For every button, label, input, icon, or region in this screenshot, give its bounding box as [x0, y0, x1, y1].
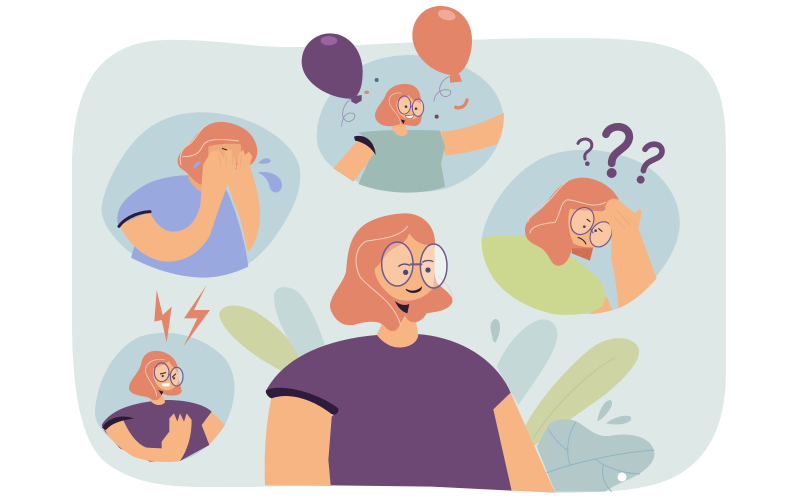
- vignette: angry with lightning: [95, 285, 234, 462]
- eyes and mouth: [583, 225, 586, 228]
- neck shadow: [158, 390, 163, 395]
- dot: large: [607, 168, 617, 178]
- mouth: [406, 288, 421, 292]
- highlight: [321, 36, 337, 45]
- dot: medium: [637, 176, 645, 184]
- eyes: [403, 270, 408, 275]
- arm and hand: [605, 199, 657, 308]
- shirt: [358, 130, 445, 193]
- arm and hand: [105, 413, 192, 462]
- blob: [102, 112, 300, 278]
- lens left: [382, 242, 413, 286]
- hair highlight: [356, 226, 408, 325]
- eyebrow: [222, 148, 227, 150]
- leaf: left blue: [274, 287, 325, 358]
- lightning left: [154, 290, 172, 342]
- small drops: [491, 319, 631, 424]
- finger lines: [613, 210, 630, 228]
- shirt: [267, 334, 512, 491]
- right arm: [202, 412, 225, 445]
- hair strand: [437, 275, 453, 302]
- teeth: [162, 383, 170, 386]
- eyes and brows: [160, 373, 176, 377]
- balloon strings: [342, 76, 452, 127]
- glasses: [154, 363, 183, 386]
- balloon: purple: [302, 33, 363, 104]
- leaf veins: [547, 422, 654, 492]
- blob: [95, 333, 234, 462]
- balloon: orange: [412, 6, 472, 83]
- hair: [330, 213, 453, 331]
- highlight: [437, 8, 457, 22]
- knot: [450, 74, 462, 83]
- shirt: [117, 175, 248, 278]
- confetti dots: [375, 78, 379, 82]
- near arm: [333, 138, 374, 182]
- hair highlight: [180, 124, 239, 165]
- eyes: [405, 105, 407, 108]
- plants behind main figure: [219, 287, 654, 492]
- neck: [392, 121, 408, 136]
- lightning right: [183, 285, 210, 347]
- near arm: [120, 150, 237, 262]
- left arm: [265, 390, 332, 486]
- vignette: happy with balloons: [302, 6, 504, 193]
- glasses: [382, 242, 447, 288]
- neck: [377, 300, 418, 347]
- eyebrows: [398, 260, 433, 267]
- hair highlight: [528, 181, 606, 233]
- bridge: [410, 261, 422, 267]
- right arm: [493, 393, 555, 493]
- leaf: right blue: [497, 319, 557, 405]
- face: [396, 95, 423, 119]
- neck: [188, 173, 202, 192]
- hair highlight: [389, 93, 402, 124]
- cuff: [119, 212, 150, 226]
- plants right: [491, 319, 654, 492]
- vignette: confused: [482, 127, 680, 315]
- confetti streamer: [456, 100, 467, 108]
- mouth: [405, 114, 414, 119]
- question: small: [578, 139, 592, 159]
- neck shadow: [395, 301, 409, 313]
- cuff: [354, 136, 376, 155]
- face: [375, 233, 435, 301]
- hair: [178, 122, 257, 184]
- question: medium: [643, 144, 662, 171]
- cuff: [102, 417, 134, 430]
- tear on hair: [193, 161, 202, 169]
- small drop near main figure: [490, 319, 500, 343]
- neck shadow: [401, 119, 405, 124]
- cuff: [266, 388, 338, 415]
- hair back shadow: [572, 245, 593, 261]
- hair highlight: [145, 359, 165, 397]
- leaf: large foreground: [537, 419, 654, 492]
- balloon body: [412, 6, 472, 75]
- leaf: right olive: [525, 338, 639, 447]
- leaf vein: [533, 358, 615, 438]
- tears: [258, 158, 282, 192]
- hair: [375, 84, 422, 126]
- background blob: [72, 38, 726, 493]
- shirt: [482, 235, 605, 315]
- knot: [351, 95, 362, 104]
- far arm: [442, 113, 504, 156]
- vignette: crying: [102, 112, 300, 278]
- confetti: [364, 78, 467, 119]
- blob: [317, 55, 503, 192]
- neck: [150, 393, 165, 405]
- white dot: [618, 472, 626, 482]
- face: [153, 361, 179, 390]
- main figure: [265, 213, 555, 493]
- face: [208, 144, 242, 168]
- lens right: [420, 244, 447, 288]
- shirt: [102, 400, 212, 462]
- finger lines: [219, 153, 242, 167]
- balloon body: [302, 33, 363, 99]
- question: large: [606, 127, 629, 163]
- hand fingers: [230, 150, 252, 180]
- hair: [525, 178, 620, 266]
- lower arm: [590, 297, 612, 314]
- leaf: left olive: [219, 305, 310, 372]
- dot: small: [585, 161, 590, 166]
- face: [568, 208, 613, 247]
- hair: [129, 351, 182, 400]
- far arm: [227, 167, 260, 252]
- blob: [482, 150, 680, 314]
- glasses: [398, 96, 424, 116]
- question marks: [578, 127, 662, 184]
- glasses: [566, 204, 616, 251]
